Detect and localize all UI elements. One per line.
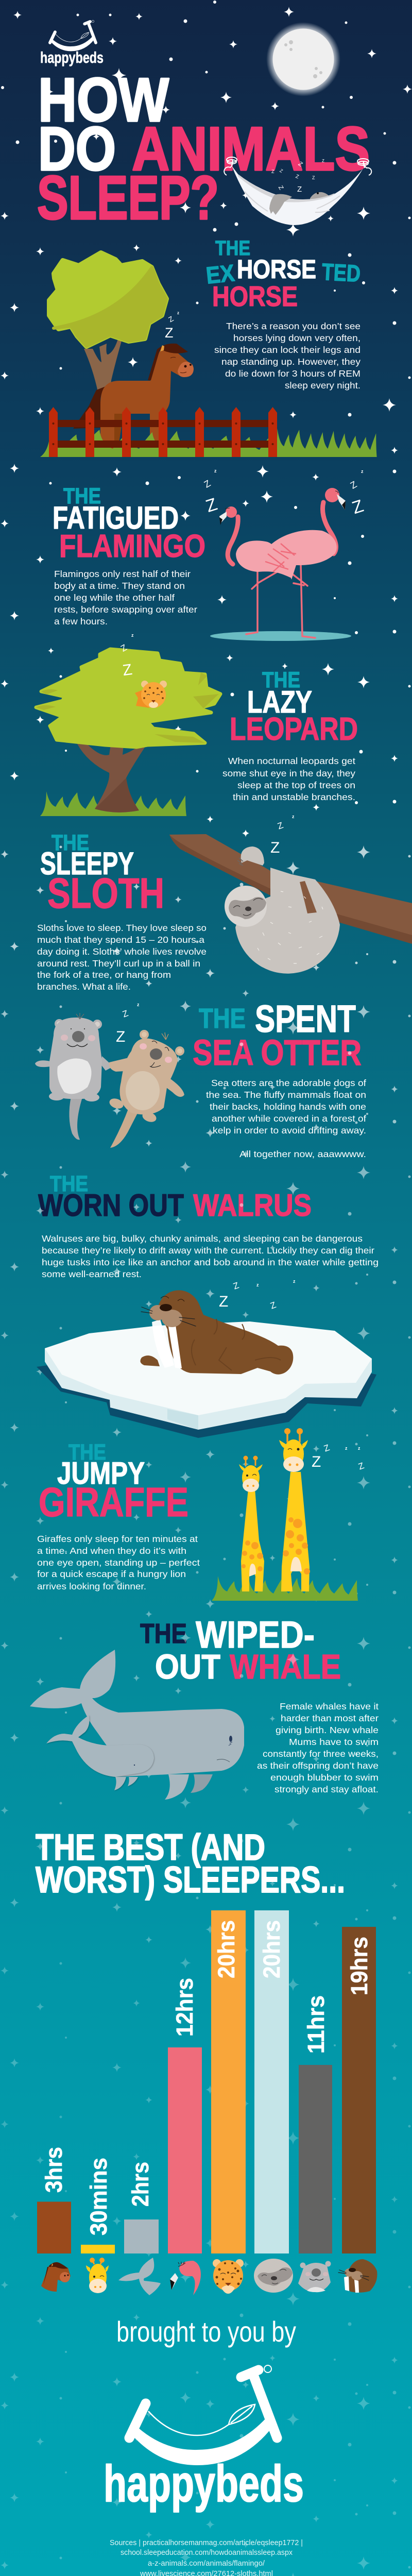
heading: spent sea otter: SEA OTTER xyxy=(193,1032,362,1073)
text: leopard: When nocturnal leopards get xyxy=(228,756,355,766)
text: horse: There’s a reason you don’t see xyxy=(226,321,360,331)
bar: giraffe 30mins xyxy=(81,2158,115,2253)
bar: whale 2hrs: 2hrs xyxy=(127,2162,153,2207)
bar: walrus 19hrs xyxy=(342,1927,376,2253)
heading: lazy leopard xyxy=(230,668,358,747)
text: leopard xyxy=(222,756,355,802)
illustration: giraffes xyxy=(212,1428,366,1601)
illustration: flamingos: z xyxy=(361,469,364,474)
tree trunk xyxy=(84,337,123,394)
illustration: sea otters: Z xyxy=(121,1008,130,1019)
text: giraffe: Giraffes only sleep for ten minutes at xyxy=(37,1534,198,1544)
icon: horse xyxy=(41,2262,71,2292)
icon: otter xyxy=(298,2261,331,2292)
hammock with sleeping sloth: Z xyxy=(297,185,302,194)
walrus xyxy=(140,1290,293,1375)
text: whale: strongly and stay afloat. xyxy=(274,1784,379,1794)
title: DO xyxy=(38,114,116,183)
logo: happybeds large: happybeds xyxy=(104,2455,304,2513)
text: sloth: the fork of a tree, or hang from xyxy=(37,970,171,980)
icon: giraffe xyxy=(86,2258,109,2293)
large giraffe xyxy=(279,1428,310,1591)
zzz: Z xyxy=(167,314,175,324)
hammock with sleeping sloth xyxy=(224,157,371,225)
illustration: giraffes: Z xyxy=(312,1453,321,1470)
zzz: Z xyxy=(165,325,173,341)
illustration: giraffes: Z xyxy=(357,1461,366,1471)
text: walrus: huge tusks into ice like an anchor and bob around in the water while getting xyxy=(42,1257,379,1267)
bar: whale 2hrs xyxy=(124,2162,159,2253)
illustration: giraffes: z xyxy=(345,1446,348,1451)
illustration: giraffes: Z xyxy=(322,1443,331,1453)
heading: jumpy giraffe: THE xyxy=(68,1440,106,1465)
heading: jumpy giraffe: GIRAFFE xyxy=(39,1479,188,1525)
heading: worn out walrus: WALRUS xyxy=(193,1188,312,1223)
text: giraffe: one eye open, standing up – perfect xyxy=(37,1557,200,1568)
text: whale: giving birth. New whale xyxy=(276,1725,379,1735)
icon: sloth xyxy=(254,2259,293,2293)
illustration: tree and leopard xyxy=(36,633,220,816)
bar: sloth 20hrs: 20hrs xyxy=(259,1920,285,1978)
title xyxy=(37,65,370,232)
zzz: z xyxy=(177,311,179,315)
moon xyxy=(266,22,340,96)
text: walrus: because they’re likely to drift away with the current. Luckily they can dig their xyxy=(42,1245,374,1256)
hammock with sleeping sloth: Z xyxy=(271,169,274,174)
grass xyxy=(40,429,377,457)
text: otter: kelp in order to avoid drifting away. xyxy=(213,1125,366,1136)
text: walrus xyxy=(42,1233,379,1279)
illustration: whales xyxy=(30,1650,244,1800)
text: whale: Female whales have it xyxy=(280,1701,379,1711)
heading: sleepy sloth: THE xyxy=(52,831,89,855)
heading: spent sea otter xyxy=(193,997,362,1073)
text: giraffe: arrives looking for dinner. xyxy=(37,1581,146,1591)
hammock with sleeping sloth: Z xyxy=(277,184,285,191)
icon: walrus xyxy=(338,2259,377,2293)
text: walrus: Walruses are big, bulky, chunky animals, and sleeping can be dangerous xyxy=(42,1233,363,1244)
illustration: walrus on ice: Z xyxy=(232,1280,241,1291)
text: horse: horses lying down very often, xyxy=(233,333,360,343)
illustration: walrus on ice: Z xyxy=(269,1300,278,1311)
bar: otter 11hrs: 11hrs xyxy=(303,1995,329,2054)
heading: wiped-out whale xyxy=(140,1614,341,1686)
icon: leopard xyxy=(213,2259,244,2294)
text: whale: enough blubber to swim xyxy=(270,1772,379,1783)
text: sloth: day doing it. Sloths’ whole lives revolve xyxy=(37,946,207,957)
heading: jumpy giraffe xyxy=(39,1440,188,1525)
bar: walrus 19hrs: 19hrs xyxy=(346,1937,372,1995)
sources: a-z-animals.com/animals/flamingo/ xyxy=(148,2560,265,2568)
text: whale: as their offspring don’t have xyxy=(257,1760,379,1771)
heading: jumpy giraffe: JUMPY xyxy=(57,1456,145,1490)
heading: best and worst sleepers xyxy=(36,1827,345,1901)
sources xyxy=(110,2539,303,2576)
illustration: tree and leopard: z xyxy=(131,633,134,638)
heading: worn out walrus: WORN OUT xyxy=(38,1188,184,1223)
tan otter xyxy=(108,1030,184,1148)
heading: lazy leopard: LAZY xyxy=(247,685,312,719)
small giraffe xyxy=(239,1456,264,1591)
bar: horse 3hrs: 3hrs xyxy=(41,2147,67,2193)
text: horse: sleep every night. xyxy=(285,380,360,391)
text: sloth xyxy=(37,923,207,992)
text: flamingo xyxy=(54,569,197,626)
text: flamingo: one leg while the other half xyxy=(54,592,175,603)
bar: flamingo 12hrs xyxy=(168,1978,202,2253)
illustration: flamingos: z xyxy=(214,468,217,473)
heading: exhorseted horse: THE xyxy=(215,237,250,260)
heading: spent sea otter: SPENT xyxy=(255,997,356,1040)
text: otter: their backs, holding hands with one xyxy=(210,1101,366,1112)
text: whale: constantly for three weeks, xyxy=(263,1749,379,1759)
heading: exhorseted horse: EX xyxy=(205,259,236,289)
title: SLEEP? xyxy=(37,163,219,232)
illustration: walrus on ice xyxy=(37,1279,376,1438)
heading: exhorseted horse: TED xyxy=(321,258,361,287)
text: walrus: some well-earned rest. xyxy=(42,1269,142,1279)
text: leopard: thin and unstable branches. xyxy=(233,792,355,802)
text: leopard: some shut eye in the day, they xyxy=(222,768,355,778)
text: sloth: around rest. They’ll curl up in a ball in xyxy=(37,958,200,969)
text: giraffe: for a quick escape if a hungry lion xyxy=(37,1569,186,1579)
text: brought to you by: brought to you by xyxy=(116,2315,296,2348)
sources: school.sleepeducation.com/howdoanimalssleep.aspx xyxy=(121,2549,293,2557)
heading: fatigued flamingo: FATIGUED xyxy=(53,500,179,535)
illustration: flamingos: Z xyxy=(202,478,212,490)
heading: fatigued flamingo: FLAMINGO xyxy=(59,529,205,564)
heading: fatigued flamingo: THE xyxy=(63,484,101,509)
illustration: walrus on ice: z xyxy=(256,1282,259,1287)
heading: lazy leopard: LEOPARD xyxy=(230,711,358,747)
heading: worn out walrus xyxy=(38,1172,312,1223)
text: whale xyxy=(257,1701,379,1794)
leopard xyxy=(135,681,167,708)
hammock with sleeping sloth: Z xyxy=(279,168,284,174)
heading: wiped-out whale: WIPED- xyxy=(196,1614,315,1656)
text: horse xyxy=(214,321,360,391)
illustration: flamingos: Z xyxy=(203,495,219,516)
heading: lazy leopard: THE xyxy=(262,668,300,692)
hammock with sleeping sloth: Z xyxy=(295,174,300,180)
illustration: sea otters: z xyxy=(137,1002,140,1007)
bar: leopard 20hrs xyxy=(211,1910,246,2253)
text: horse: nap standing up. However, they xyxy=(221,357,360,367)
bar: otter 11hrs xyxy=(299,1995,332,2253)
horse xyxy=(73,344,194,452)
logo: happybeds small xyxy=(40,20,104,66)
illustration: walrus on ice: z xyxy=(293,1279,296,1284)
title: ANIMALS xyxy=(132,114,370,183)
text: flamingo: rests, before swapping over after xyxy=(54,604,197,615)
text: whale: harder than most after xyxy=(281,1713,379,1723)
text: sloth: much that they spend 15 – 20 hours a xyxy=(37,935,204,945)
heading: sleepy sloth xyxy=(40,831,164,917)
text: whale: Mums have to swim xyxy=(289,1737,379,1747)
zzz xyxy=(165,311,179,341)
illustration: walrus on ice: Z xyxy=(219,1293,228,1310)
heading: exhorseted horse: HORSE xyxy=(212,280,298,312)
text: flamingo: body at a time. They stand on xyxy=(54,581,185,591)
illustration: tree and leopard: Z xyxy=(119,642,129,654)
bar chart xyxy=(37,1910,376,2253)
heading: exhorseted horse: HORSE xyxy=(237,255,316,284)
bar: leopard 20hrs: 20hrs xyxy=(213,1920,239,1978)
illustration: flamingos: Z xyxy=(350,496,366,518)
hammock with sleeping sloth: Z xyxy=(322,159,324,163)
text: flamingo: a few hours. xyxy=(54,616,108,626)
text: flamingo: Flamingos only rest half of their xyxy=(54,569,191,579)
text: giraffe xyxy=(37,1534,200,1591)
text: otter: another while covered in a forest of xyxy=(212,1113,366,1124)
sources: Sources | practicalhorsemanmag.com/article/eqsleep1772 | xyxy=(110,2539,303,2547)
text: leopard: sleep at the top of trees on xyxy=(237,780,355,790)
illustration: giraffes: z xyxy=(358,1446,360,1451)
bar: sloth 20hrs xyxy=(254,1910,289,2253)
heading: wiped-out whale: THE xyxy=(140,1618,187,1649)
text: otter: the sea. The fluffy mammals float on xyxy=(206,1090,366,1100)
logo: happybeds large xyxy=(104,2365,304,2513)
icon: whale tail xyxy=(118,2258,161,2295)
fence xyxy=(49,407,277,457)
text: horse: since they can lock their legs and xyxy=(214,345,360,355)
text: giraffe: a time. And when they do it’s with xyxy=(37,1546,186,1556)
illustration: sloth on branch: z xyxy=(292,814,295,819)
illustration: flamingos xyxy=(202,468,366,641)
illustration: sloth on branch xyxy=(169,814,412,974)
text: otter: All together now, aaawwww. xyxy=(239,1149,366,1159)
title: HOW xyxy=(38,65,169,134)
heading: best and worst sleepers: THE BEST (AND xyxy=(36,1827,265,1868)
bar: flamingo 12hrs: 12hrs xyxy=(171,1978,198,2037)
grey otter xyxy=(35,1013,113,1140)
heading: best and worst sleepers: WORST) SLEEPERS... xyxy=(36,1860,345,1901)
illustration: flamingos: Z xyxy=(349,479,358,491)
illustration: tree and leopard: Z xyxy=(122,661,133,679)
illustration: tree and horse xyxy=(40,253,377,457)
illustration: sloth on branch: Z xyxy=(276,820,285,831)
text: otter: Sea otters are the adorable dogs of xyxy=(211,1078,366,1088)
hammock with sleeping sloth: Z xyxy=(312,175,315,180)
heading: wiped-out whale: WHALE xyxy=(230,1648,341,1686)
heading: spent sea otter: THE xyxy=(199,1003,246,1034)
heading: wiped-out whale: OUT xyxy=(155,1648,220,1686)
heading: worn out walrus: THE xyxy=(50,1172,88,1196)
heading: exhorseted horse xyxy=(205,237,361,312)
hammock with sleeping sloth: Z xyxy=(297,160,304,168)
illustration: sea otters: Z xyxy=(116,1028,125,1045)
text: otter xyxy=(206,1078,366,1159)
illustration: sea otters xyxy=(35,1002,184,1148)
logo: happybeds small: happybeds xyxy=(40,48,104,66)
text: horse: do lie down for 3 hours of REM xyxy=(225,368,360,379)
tree crown xyxy=(49,253,166,346)
illustration: sloth on branch: Z xyxy=(270,839,280,856)
text: sloth: Sloths love to sleep. They love sleep so xyxy=(37,923,207,933)
bar: horse 3hrs xyxy=(37,2147,71,2253)
icon: flamingo xyxy=(170,2261,201,2295)
heading: sleepy sloth: SLEEPY xyxy=(40,846,134,881)
heading: fatigued flamingo xyxy=(53,484,205,564)
text: sloth: branches. What a life. xyxy=(37,981,131,992)
bar: giraffe 30mins: 30mins xyxy=(85,2158,112,2235)
heading: sleepy sloth: SLOTH xyxy=(47,869,164,917)
